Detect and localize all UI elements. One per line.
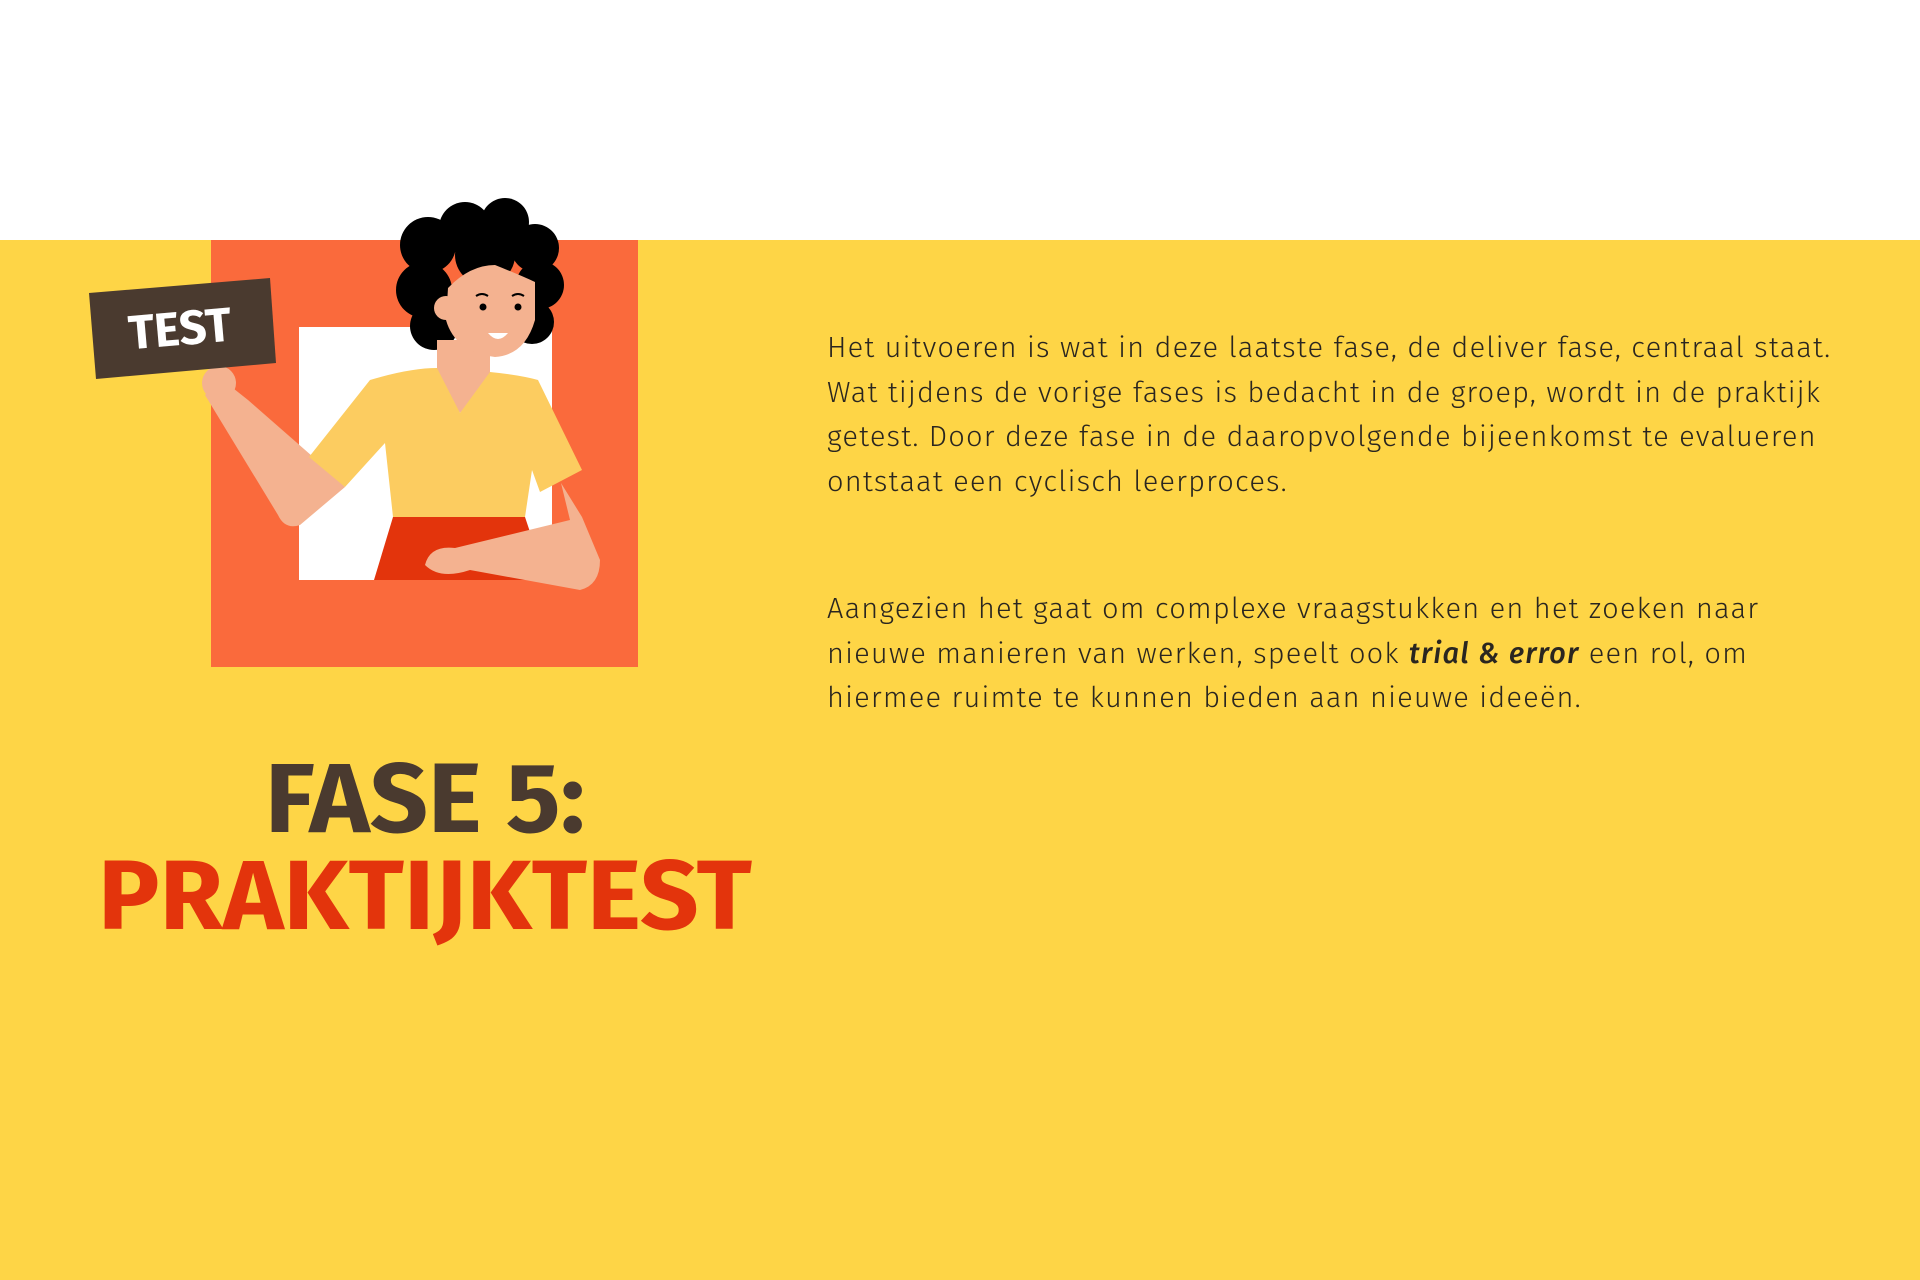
text block: paragraph 1 <box>827 330 1831 499</box>
text block: paragraph 1: Wat tijdens de vorige fases is bedacht in de groep, wordt in de praktijk <box>827 375 1821 410</box>
illustration: woman holding test sign <box>89 198 752 955</box>
TEST sign: TEST <box>126 296 234 362</box>
text block: paragraph 2: hiermee ruimte te kunnen bieden aan nieuwe ideeën. <box>827 680 1582 715</box>
text block: paragraph 2 <box>827 591 1759 715</box>
title: FASE 5: <box>265 740 585 858</box>
text block: paragraph 1: getest. Door deze fase in de daaropvolgende bijeenkomst te evalueren <box>827 419 1817 454</box>
text block: paragraph 1: ontstaat een cyclisch leerproces. <box>827 464 1288 499</box>
title <box>98 740 752 955</box>
title: PRAKTIJKTEST <box>98 837 752 955</box>
text block: paragraph 2: Aangezien het gaat om complexe vraagstukken en het zoeken naar <box>827 591 1759 626</box>
TEST sign <box>89 278 276 379</box>
text block: paragraph 2: nieuwe manieren van werken, speelt ook trial & error een rol, om <box>827 636 1748 671</box>
orange square frame <box>211 240 638 667</box>
text block: paragraph 1: Het uitvoeren is wat in deze laatste fase, de deliver fase, centraal staat. <box>827 330 1831 365</box>
woman figure <box>202 198 600 590</box>
